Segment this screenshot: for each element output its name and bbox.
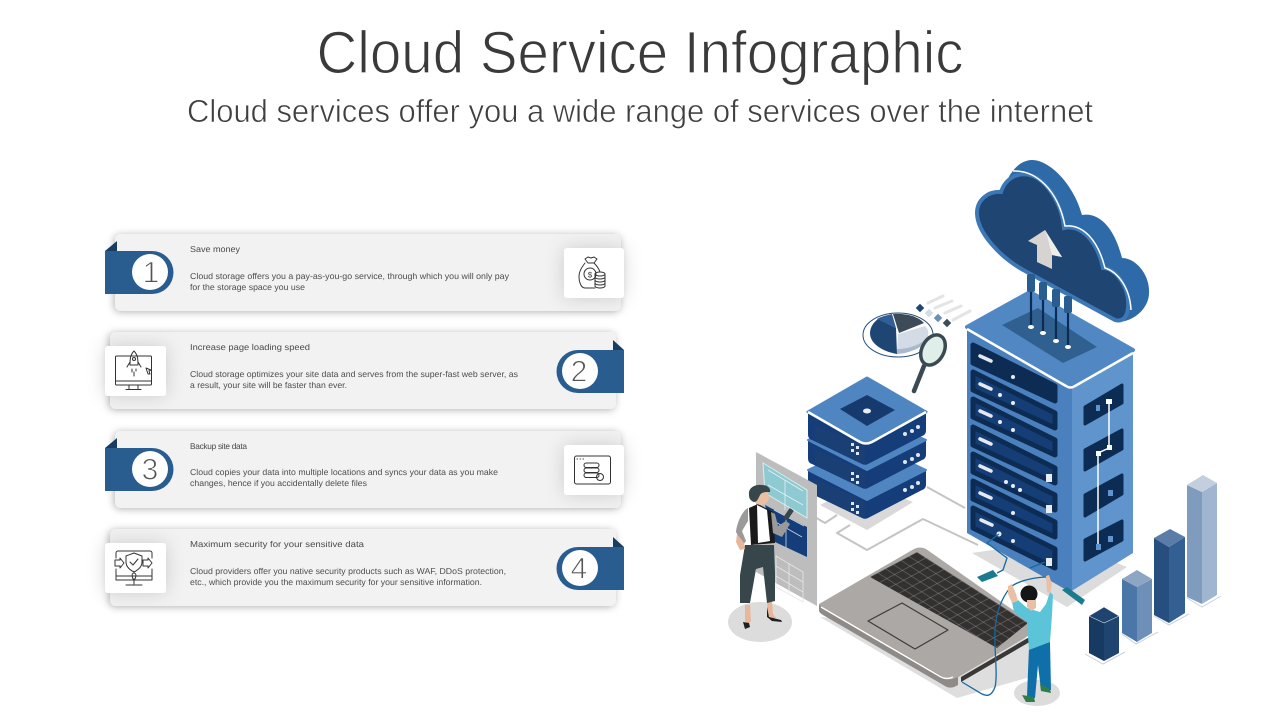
ribbon number 2: 2: [571, 356, 587, 388]
bar 4: [1187, 475, 1217, 604]
panel: increase page loading speed: [105, 332, 624, 409]
icon: money bag: $: [588, 270, 593, 280]
heading: Maximum security for your sensitive data: [190, 539, 364, 549]
body text: changes, hence if you accidentally delete files: [190, 478, 367, 488]
body text: etc., which provide you the maximum security for your sensitive information.: [190, 577, 482, 587]
bar 1: [1089, 607, 1119, 661]
body text: [190, 271, 510, 292]
bar 3: [1154, 529, 1185, 623]
tower top: [967, 292, 1133, 385]
heading: Save money: [190, 244, 241, 254]
magnifier: [914, 331, 950, 391]
keyboard: [870, 552, 1028, 648]
floor shadows and connectors: [808, 482, 1127, 698]
network cables and plugs: [962, 534, 1085, 695]
woman with dashboard panel: [728, 452, 817, 642]
illustration: cloud infrastructure: [728, 160, 1221, 706]
ribbon number 1: [105, 241, 173, 294]
cables: cloud to tower: [1027, 274, 1072, 349]
rack lights: [980, 356, 992, 525]
ribbon number 4: 4: [571, 552, 587, 586]
legend swatches: [916, 296, 970, 327]
icon: money bag: [564, 248, 624, 298]
small server stack: [808, 378, 926, 519]
ribbon number 3: 3: [142, 454, 158, 486]
heading: Increase page loading speed: [190, 342, 310, 352]
body text: Cloud providers offer you native security products such as WAF, DDoS protection,: [190, 566, 506, 576]
tier 2: [808, 440, 926, 489]
body text: Cloud storage optimizes your site data and serves from the super-fast web server, as: [190, 369, 518, 379]
body text: [190, 467, 498, 488]
body text: a result, your site will be faster than ever.: [190, 380, 347, 390]
server tower: [967, 292, 1133, 592]
icon: security shield: [105, 543, 166, 593]
ribbon number 3: [105, 438, 173, 491]
subtitle: Cloud services offer you a wide range of services over the internet: [187, 93, 1093, 129]
panel: backup site data: [105, 431, 624, 508]
trackpad: [868, 603, 948, 649]
side windows: [1085, 385, 1122, 560]
bar 2: [1122, 570, 1152, 642]
figure: [736, 485, 794, 629]
man with cable: [1008, 575, 1060, 706]
ribbon number 4: [556, 537, 624, 590]
body text: Cloud storage offers you a pay-as-you-go service, through which you will only pay: [190, 271, 510, 281]
body text: [190, 369, 518, 390]
cloud: [976, 160, 1149, 322]
title: Cloud Service Infographic: [316, 19, 964, 86]
panel: save money: [105, 234, 624, 311]
lights: [851, 425, 920, 514]
ribbon number 1: 1: [143, 256, 159, 290]
body text: [190, 566, 506, 587]
panel: maximum security: [105, 529, 624, 606]
body text: for the storage space you use: [190, 282, 305, 292]
tier 3: [808, 470, 926, 519]
pie chart with magnifier: [863, 296, 970, 391]
body text: Cloud copies your data into multiple locations and syncs your data as you make: [190, 467, 498, 477]
icon: rocket monitor: [105, 346, 166, 396]
rack units: [973, 345, 1055, 568]
upload arrow: [1028, 230, 1062, 269]
dashboard panel: [756, 452, 817, 606]
icon: server backup: [564, 445, 624, 495]
ribbon number 2: [556, 340, 624, 393]
bar chart: [1085, 475, 1221, 664]
tier 1: [808, 414, 926, 465]
laptop: [819, 548, 1040, 688]
heading: Backup site data: [190, 441, 247, 451]
